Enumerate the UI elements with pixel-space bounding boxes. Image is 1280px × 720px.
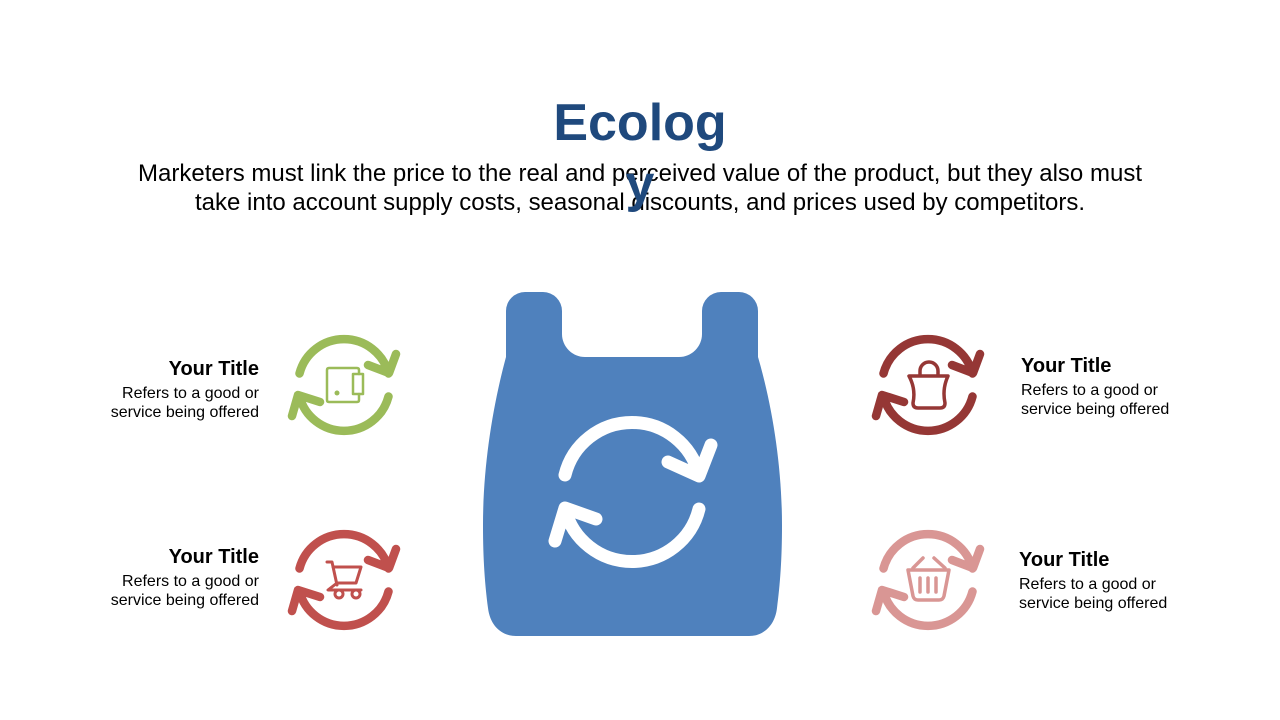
title <box>553 94 727 213</box>
item: top right <box>876 339 1169 431</box>
description: service being offered <box>1019 595 1167 612</box>
description: Refers to a good or <box>122 385 260 402</box>
icon: cart in red cycle arrows <box>292 534 396 626</box>
intro text <box>138 160 1142 216</box>
description <box>1019 576 1167 612</box>
heading: Your Title <box>169 358 259 380</box>
description <box>1021 382 1169 418</box>
icon: bag in dark red cycle arrows <box>876 339 980 431</box>
item: bottom left <box>111 534 396 626</box>
heading: Your Title <box>1021 355 1111 377</box>
icon: wallet in green cycle arrows <box>292 339 396 431</box>
description <box>111 385 260 421</box>
title: y <box>626 155 655 213</box>
description: Refers to a good or <box>1019 576 1157 593</box>
central shopping bag <box>483 292 782 636</box>
bag shape <box>483 292 782 636</box>
description: service being offered <box>111 592 259 609</box>
title: Ecolog <box>553 94 727 152</box>
item: bottom right <box>876 534 1167 626</box>
heading: Your Title <box>169 546 259 568</box>
intro text: take into account supply costs, seasonal discounts, and prices used by competitors. <box>195 189 1085 216</box>
icon: basket in pink cycle arrows <box>876 534 980 626</box>
description: service being offered <box>1021 401 1169 418</box>
item: top left <box>111 339 396 431</box>
heading: Your Title <box>1019 549 1109 571</box>
intro text: Marketers must link the price to the real and perceived value of the product, but they also must <box>138 160 1142 187</box>
description: Refers to a good or <box>1021 382 1159 399</box>
recycle arrows: white <box>555 422 711 562</box>
description: service being offered <box>111 404 259 421</box>
description <box>111 573 260 609</box>
description: Refers to a good or <box>122 573 260 590</box>
